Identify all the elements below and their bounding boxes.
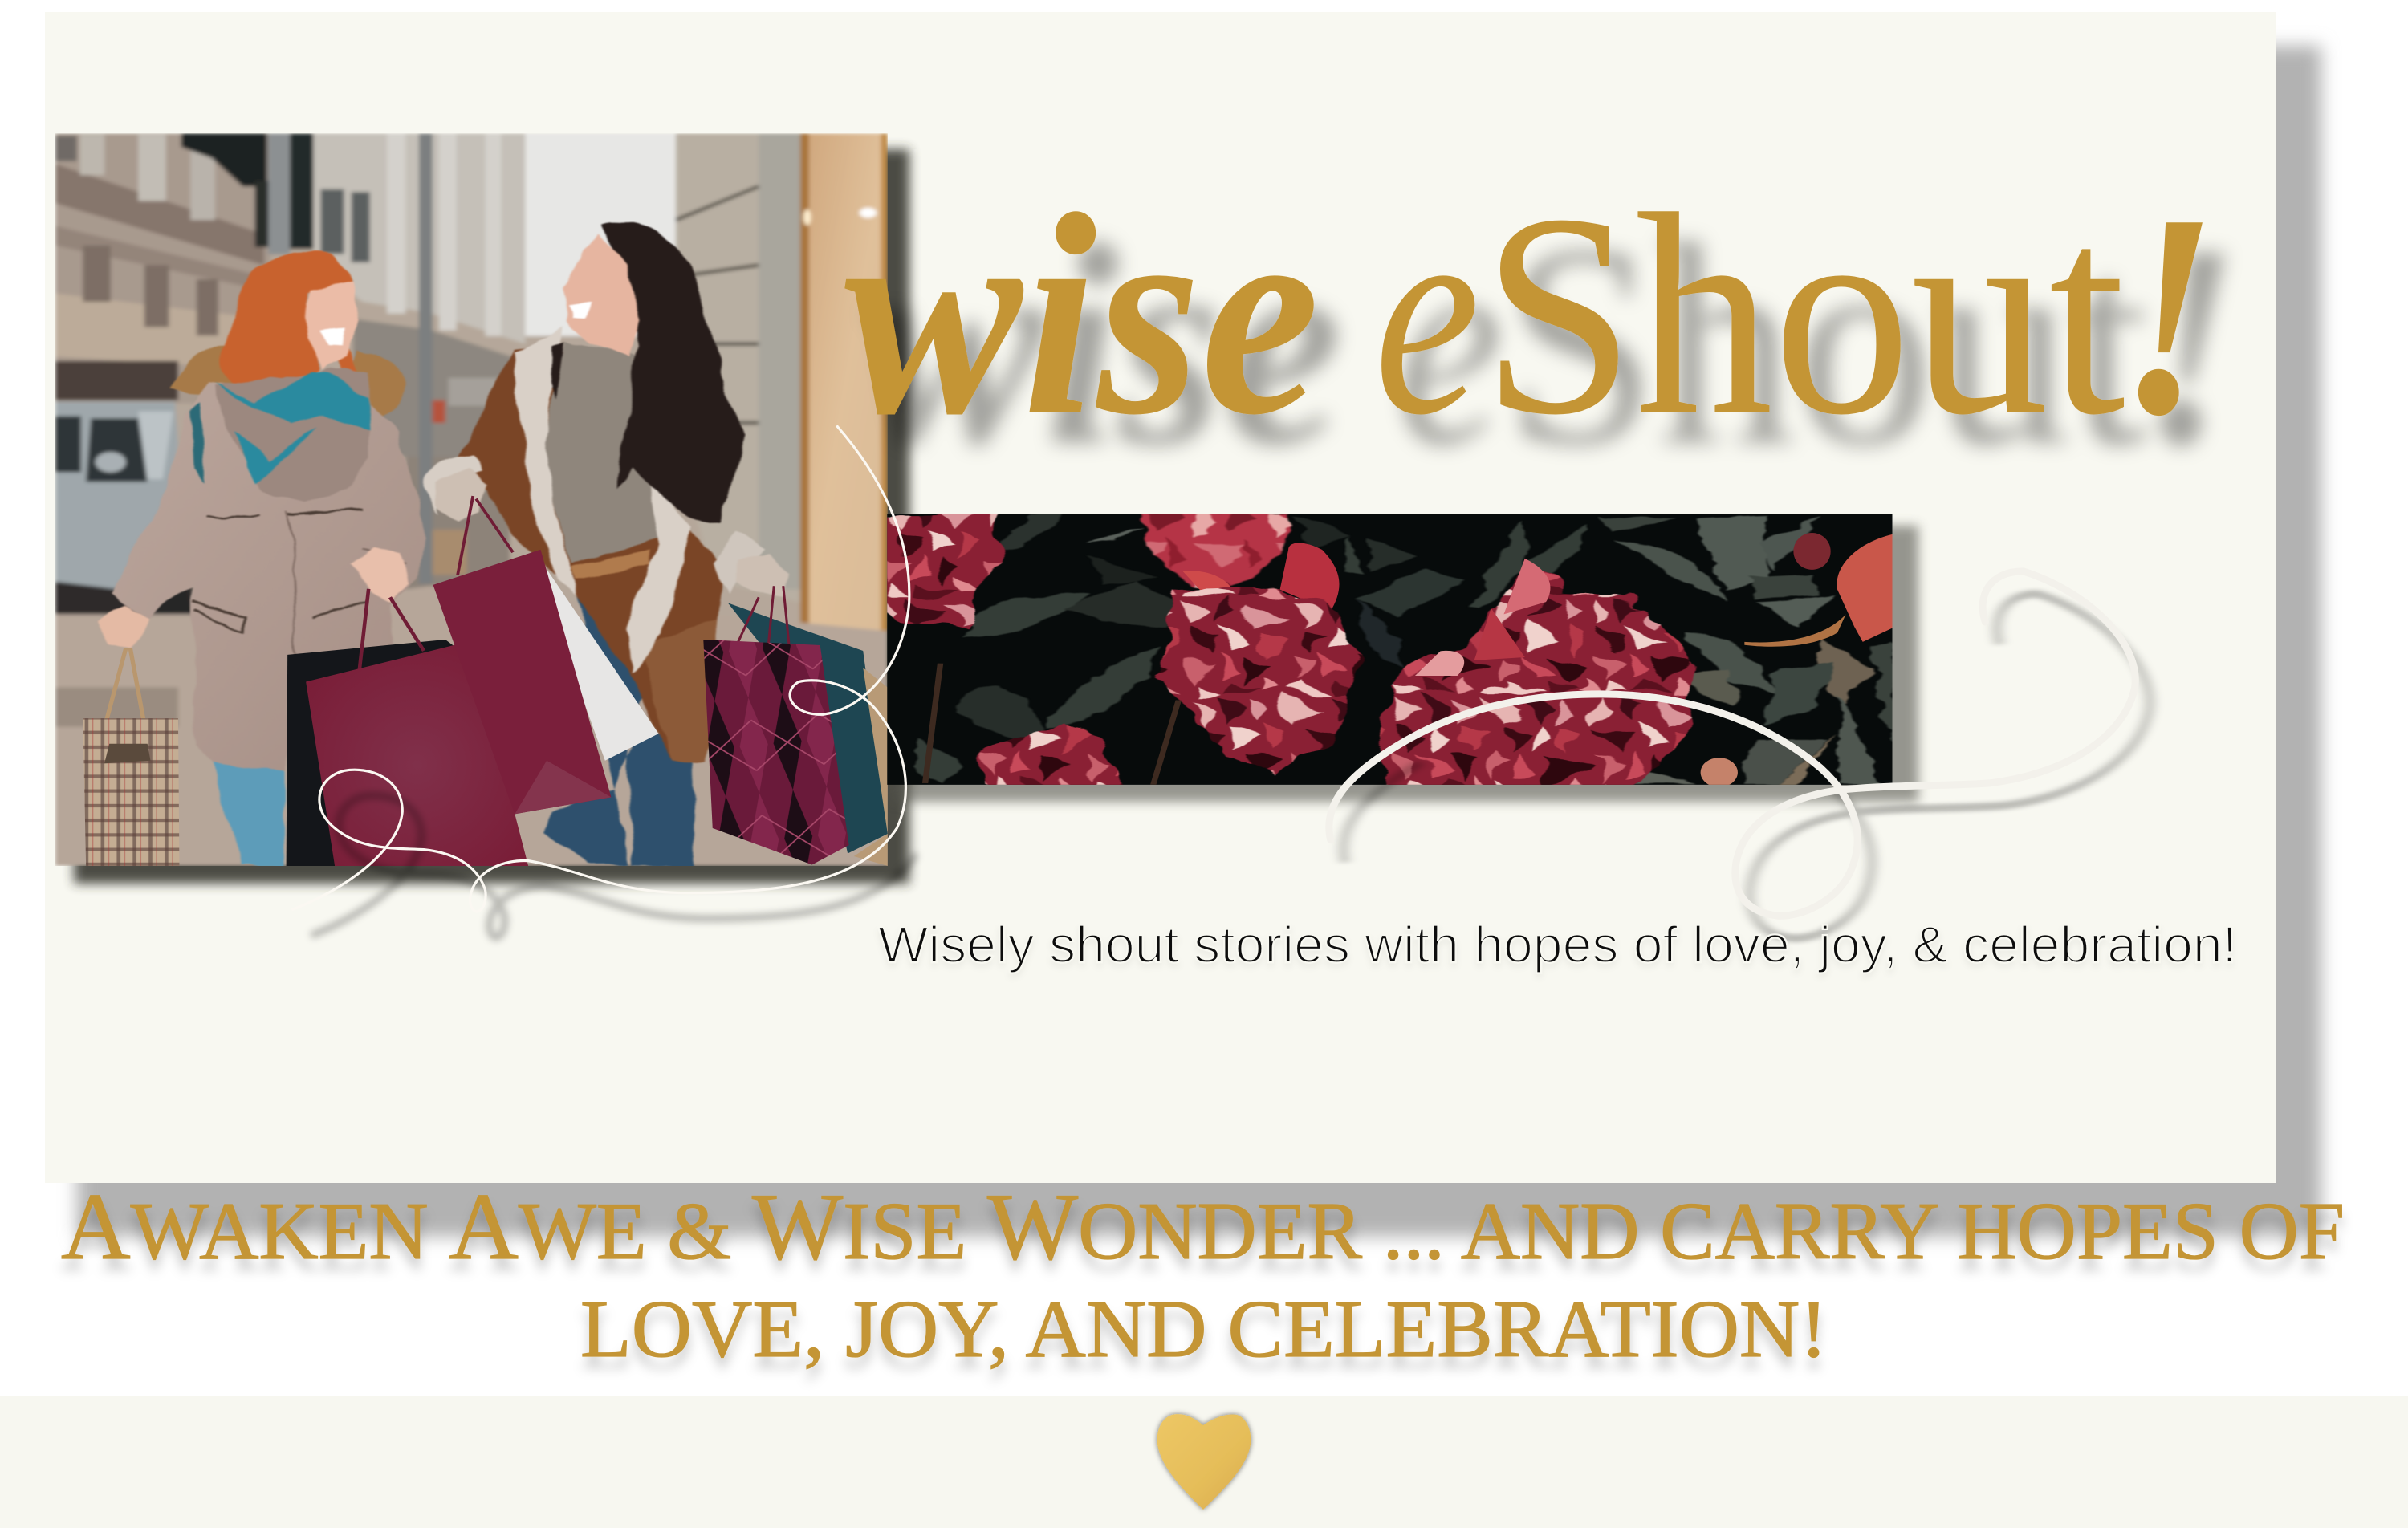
large maroon bag: [306, 589, 528, 866]
leaves: [909, 514, 1892, 785]
title letter: e: e: [1374, 154, 1480, 474]
white paper bag: [547, 569, 658, 761]
photo: dark peonies: [883, 498, 1938, 805]
large decorative swirl: [1329, 571, 2135, 916]
argyle bag: [703, 586, 849, 865]
title word: wise: wise: [844, 154, 1320, 474]
title punctuation: !: [2119, 154, 2217, 474]
thin decorative swirl: [292, 425, 909, 912]
icon: gold heart: [1157, 1414, 1251, 1510]
upright maroon bag: [433, 496, 611, 814]
bag with plaid pattern: [83, 648, 179, 866]
peony lower right: [1381, 559, 1686, 788]
peony bottom left: [976, 725, 1132, 788]
panel shadow: [77, 46, 2321, 1237]
headline line two: LOVE, JOY, AND CELEBRATION!: [580, 1284, 1828, 1375]
thin swirl shadow: [311, 795, 916, 937]
flower photo shadow: [891, 526, 1918, 802]
main cream panel: [45, 12, 2276, 1183]
peony bud top: [1144, 513, 1339, 612]
footer band: [0, 1396, 2408, 1528]
teal bag: [728, 603, 888, 854]
striped bag: [854, 668, 888, 866]
shopping photo shadow: [74, 149, 909, 884]
photo: two women shopping: [55, 133, 888, 866]
dark background: [883, 498, 1938, 805]
woman with red hair: [98, 251, 428, 866]
large swirl shadow: [1344, 594, 2150, 938]
stems: [925, 664, 1178, 785]
black shopping bag: [286, 640, 454, 866]
title: wise eShout!: [844, 154, 2217, 474]
tagline: Wisely shout stories with hopes of love, joy, & celebration!: [878, 916, 2237, 973]
title word: Shout: Shout: [1482, 154, 2126, 474]
peony centre: [1166, 587, 1357, 783]
headline text: [61, 1173, 2345, 1375]
woman with dark hair: [424, 222, 789, 866]
peony top left: [883, 513, 1001, 628]
street background: [55, 133, 888, 866]
headline line one: AWAKEN AWE & WISE WONDER ... AND CARRY HOPES OF: [61, 1173, 2345, 1279]
bud far right: [1701, 533, 1892, 787]
